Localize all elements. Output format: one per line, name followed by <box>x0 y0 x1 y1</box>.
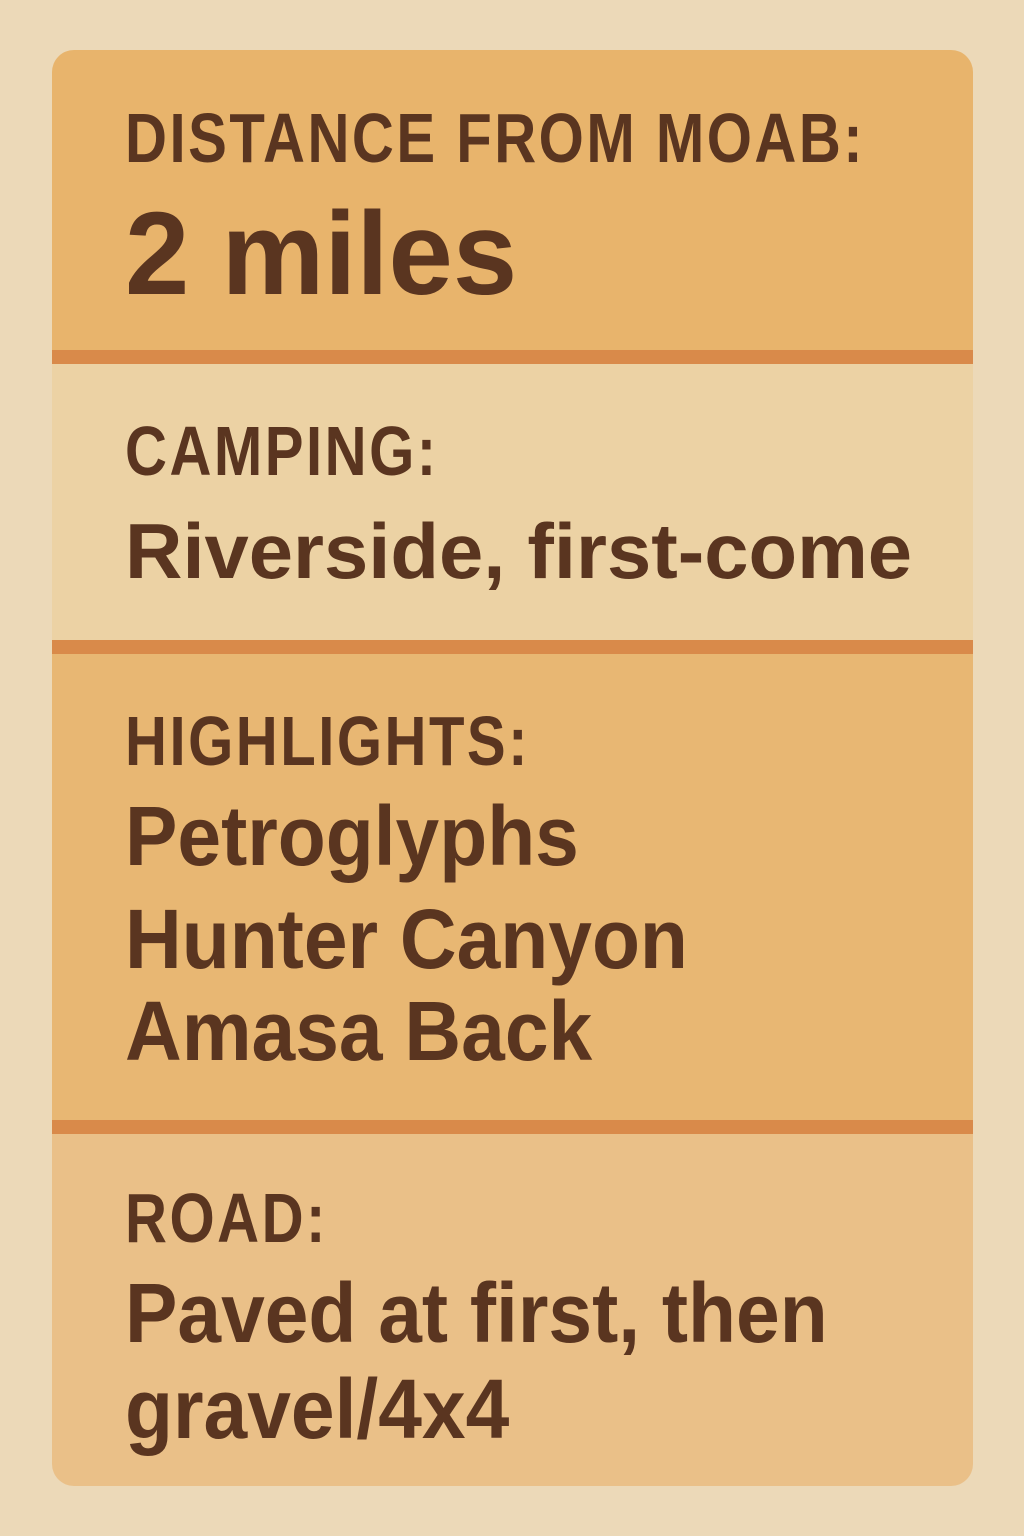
value: highlights list: Amasa Back <box>125 984 592 1078</box>
panel: highlights <box>52 654 973 1120</box>
label: highlights: HIGHLIGHTS: <box>125 702 530 780</box>
panel: road <box>52 1134 973 1486</box>
value: camping: Riverside, first-come <box>125 507 912 595</box>
label: road: ROAD: <box>125 1179 328 1257</box>
label: camping: CAMPING: <box>125 412 439 490</box>
value: road: Paved at first, then <box>125 1266 828 1360</box>
panel: camping <box>52 364 973 640</box>
value: highlights list: Hunter Canyon <box>125 892 688 986</box>
value: road: gravel/4x4 <box>125 1362 509 1456</box>
value: road <box>125 1266 828 1456</box>
value: 2 miles: 2 miles <box>125 188 517 320</box>
value: highlights list: Petroglyphs <box>125 789 579 883</box>
panel: distance <box>52 50 973 350</box>
label: distance: DISTANCE FROM MOAB: <box>125 99 865 177</box>
value: highlights list <box>125 789 688 1078</box>
